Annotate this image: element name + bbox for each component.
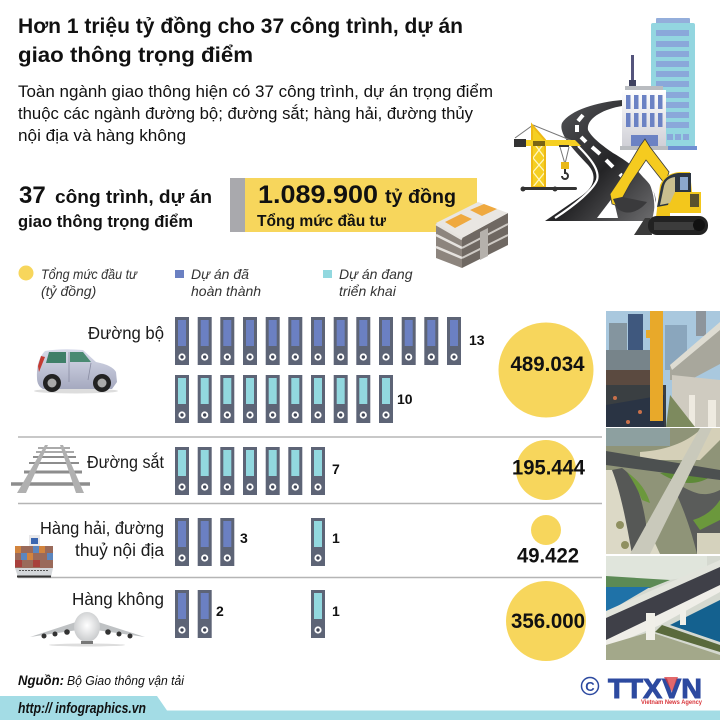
binders: 10 in progress: 10 xyxy=(397,391,413,407)
value circle: 49.422: 49.422 xyxy=(517,544,579,568)
binders: 10 in progress xyxy=(175,375,413,423)
binders: 1 in progress: 1 xyxy=(332,603,340,619)
value circle: 489.034: 489.034 xyxy=(510,353,585,376)
legend: completed: hoàn thành xyxy=(191,283,261,299)
row: road: Đường bộ xyxy=(88,323,164,343)
legend: in progress xyxy=(323,266,413,299)
value circle: 356.000 xyxy=(506,581,586,661)
binders: 1 in progress xyxy=(311,518,340,566)
title: Hơn 1 triệu tỷ đồng cho 37 công trình, dự án xyxy=(18,15,463,38)
value circle: 49.422 xyxy=(517,515,579,568)
intro text xyxy=(18,82,493,145)
intro text: Toàn ngành giao thông hiện có 37 công trình, dự án trọng điểm xyxy=(18,82,493,101)
legend: total investment: (tỷ đồng) xyxy=(41,283,96,299)
icon: tall tower xyxy=(651,18,697,150)
legend: in progress: triển khai xyxy=(339,283,397,299)
icon: office building xyxy=(620,55,668,150)
legend: total investment xyxy=(18,266,138,299)
title: giao thông trọng điểm xyxy=(18,44,253,67)
icon: money stack xyxy=(436,202,508,268)
value circle: 489.034 xyxy=(498,322,594,418)
footer band with url: http:// infographics.vn xyxy=(18,701,146,717)
row: railway: Đường sắt xyxy=(87,451,164,472)
stat: 37 projects: giao thông trọng điểm xyxy=(18,212,193,231)
legend xyxy=(18,266,413,299)
legend: completed xyxy=(175,266,261,299)
logo: TTXVN: C xyxy=(585,679,595,694)
row: railway xyxy=(11,440,585,500)
row: maritime and inland waterways xyxy=(15,515,579,578)
icon: airplane xyxy=(30,612,145,646)
logo: TTXVN: Vietnam News Agency xyxy=(641,700,703,706)
value circle: 356.000: 356.000 xyxy=(511,610,585,633)
source xyxy=(18,672,185,688)
stat: 37 projects xyxy=(18,182,212,231)
legend: in progress: Dự án đang xyxy=(339,266,413,282)
photo: elevated railway under construction xyxy=(606,311,720,427)
binders: 3 completed xyxy=(175,518,248,566)
row: aviation: Hàng không xyxy=(72,589,164,609)
icon: rail track xyxy=(11,445,90,493)
stat: total investment: tỷ đồng xyxy=(385,187,456,208)
photo: highway interchange xyxy=(606,428,720,554)
stat: 37 projects: công trình, dự án xyxy=(55,187,212,207)
source: Nguồn: xyxy=(18,672,64,688)
stat: 37 projects: 37 xyxy=(19,182,46,209)
stat: total investment: Tổng mức đầu tư xyxy=(257,212,386,230)
binders: 7 in progress xyxy=(175,447,340,495)
stat: total investment xyxy=(230,178,477,232)
binders: 1 in progress: 1 xyxy=(332,530,340,546)
logo: TTXVN: TTXVN xyxy=(608,673,702,704)
intro text: thuộc các ngành đường bộ; đường sắt; hàng hải, đường thủy xyxy=(18,104,473,123)
row: maritime and inland waterways: Hàng hải, đường xyxy=(40,518,164,538)
row: road xyxy=(34,317,594,423)
icon: car xyxy=(34,349,118,394)
photo: bridge over river xyxy=(606,556,720,660)
intro text: nội địa và hàng không xyxy=(18,126,186,145)
stat: total investment: 1.089.900 xyxy=(258,181,378,209)
icon: excavator xyxy=(610,139,708,235)
legend: completed: Dự án đã xyxy=(191,266,249,282)
binders: 3 completed: 3 xyxy=(240,530,248,546)
icon: container ship xyxy=(15,535,53,578)
icon: winding road xyxy=(545,100,656,221)
binders: 2 completed: 2 xyxy=(216,603,224,619)
binders: 13 completed: 13 xyxy=(469,332,485,348)
legend: total investment: Tổng mức đầu tư xyxy=(41,266,138,282)
value circle: 195.444 xyxy=(512,440,585,500)
binders: 1 in progress xyxy=(311,590,340,638)
binders: 7 in progress: 7 xyxy=(332,461,340,477)
row: aviation xyxy=(30,581,586,661)
value circle: 195.444: 195.444 xyxy=(512,456,585,480)
illustration: construction scene xyxy=(514,18,708,235)
icon: tower crane xyxy=(514,125,581,192)
row: maritime and inland waterways: thuỷ nội địa xyxy=(75,540,164,560)
binders: 2 completed xyxy=(175,590,224,638)
source: Bộ Giao thông vận tải xyxy=(67,673,185,688)
title xyxy=(18,15,463,67)
binders: 13 completed xyxy=(175,317,485,365)
footer band with url xyxy=(0,696,720,720)
